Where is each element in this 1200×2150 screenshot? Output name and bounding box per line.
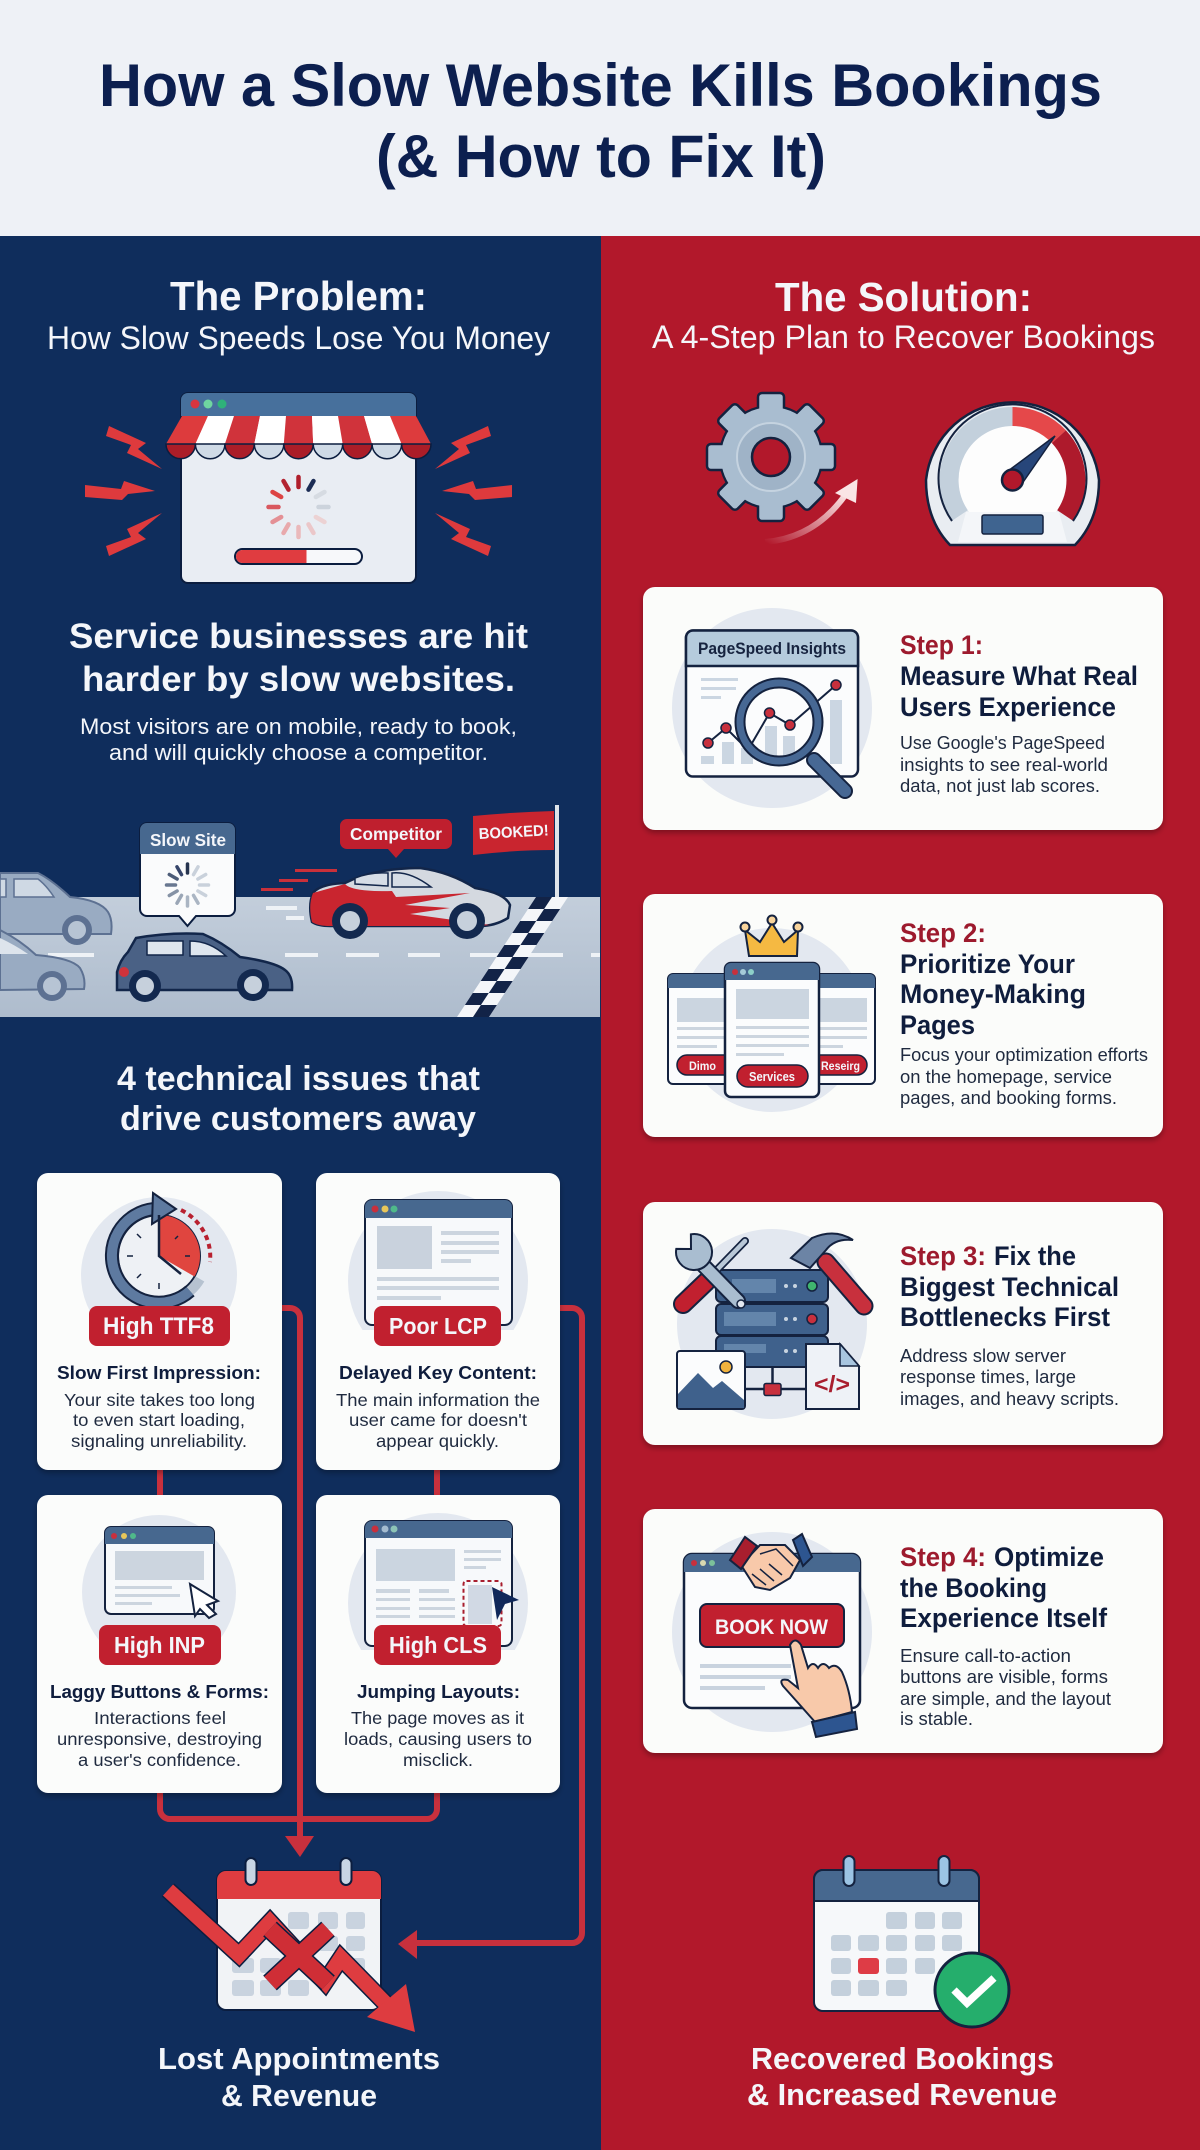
text: slow first impression: to even start loading, [73,1410,245,1430]
arrow: upward swoosh [765,479,858,542]
text: step 1: Measure What Real [900,661,1138,691]
text: slow first impression [57,1362,261,1451]
badge: Poor LCP: Poor LCP [389,1313,487,1339]
badge: High CLS [374,1625,501,1665]
icon: handshake [730,1534,812,1590]
callout: competitor: Competitor [350,824,442,844]
flag: booked [473,805,559,897]
illustration: road race scene [0,805,600,1017]
icon: connector [745,1367,806,1396]
callout: slow site: Slow Site [150,830,226,850]
badge: High CLS: High CLS [389,1632,487,1658]
icon: speedometer [926,402,1099,545]
heading: the solution: A 4-Step Plan to Recover Bookings [652,319,1155,355]
text: laggy buttons [50,1681,269,1770]
text: step 3: Bottlenecks First [900,1302,1110,1332]
text: lost appointments [158,2041,440,2113]
text: step 4 [900,1542,1111,1729]
header band [0,0,1200,236]
text: step 1 [900,630,1138,796]
arrow: down to calendar [285,1836,314,1857]
title: How a Slow Website Kills Bookings [99,52,1102,119]
text: step 2: pages, and booking forms. [900,1087,1117,1108]
badge: High INP: High INP [114,1632,205,1658]
arrow: falling revenue zigzag [168,1890,415,2032]
text: delayed key content: Delayed Key Content: [339,1362,537,1383]
text: delayed key content: The main information the [336,1390,540,1410]
text: service businesses [69,617,528,765]
badge: Poor LCP [374,1306,501,1346]
heading: the problem: How Slow Speeds Lose You Money [47,320,550,356]
heading: the solution: The Solution: [775,274,1032,320]
icon: prioritized pages: Services [749,1070,795,1084]
icon: slow storefront browser [166,393,431,583]
text: service businesses: and will quickly choose a competitor. [109,740,488,765]
icon: screwdriver [683,1241,745,1304]
heading: the problem: The Problem: [170,273,427,319]
icon: pagespeed insights: PageSpeed Insights [698,640,846,658]
text: step 4: is stable. [900,1708,973,1729]
text: step 2 [900,918,1148,1108]
text: step 3: Step 3: [900,1241,986,1271]
icon: green check [935,1953,1009,2027]
finish line [457,897,568,1017]
text: step 1: insights to see real-world [900,754,1108,775]
icon: clock [112,1193,210,1303]
text: service businesses: Service businesses are hit [69,617,528,656]
car: grey back car [0,873,112,945]
text: laggy buttons: Laggy Buttons & Forms: [50,1681,269,1702]
car: red competitor car [310,868,510,939]
flag: booked: BOOKED! [478,822,549,843]
icon: lost appointments calendar [168,1858,415,2032]
icon: pointing hand [781,1640,857,1737]
connectors: issues to lost revenue [160,1308,582,1943]
heading: the solution [652,274,1155,355]
text: step 3: Biggest Technical [900,1272,1119,1302]
text: jumping layouts [344,1681,532,1770]
text: step 4: the Booking [900,1573,1047,1603]
text: jumping layouts: The page moves as it [351,1708,524,1728]
car: grey front car [0,930,84,1001]
text: step 1: Use Google's PageSpeed [900,732,1105,753]
card: high TTFB [37,1173,282,1470]
text: jumping layouts: Jumping Layouts: [357,1681,520,1702]
text: recovered bookings: & Increased Revenue [747,2077,1057,2112]
text: step 2: on the homepage, service [900,1066,1112,1087]
text: step 1: data, not just lab scores. [900,775,1100,796]
title: (& How to Fix It) [376,123,826,190]
heading: 4 technical issues [117,1060,480,1138]
text: step 2: Prioritize Your [900,949,1075,979]
heading: the problem [47,273,550,356]
text: slow first impression: Your site takes too long [64,1390,255,1410]
text: step 4: Ensure call-to-action [900,1645,1071,1666]
text: service businesses: Most visitors are on mobile, ready to book, [80,714,517,739]
text: lost appointments: Lost Appointments [158,2041,440,2076]
text: step 4: buttons are visible, forms [900,1666,1108,1687]
panel: the solution [601,236,1200,2150]
text: step 3 [900,1241,1119,1409]
icon: book now browser: BOOK NOW [715,1615,829,1639]
text: step 4: Optimize [994,1542,1104,1572]
text: laggy buttons: a user's confidence. [78,1750,241,1770]
icon: crown [740,916,802,956]
icon: browser with cursor [105,1527,218,1618]
title [99,52,1102,190]
icon: shifting layout [365,1521,519,1646]
text: step 2: Step 2: [900,918,986,948]
icon: code file [806,1344,859,1409]
text: delayed key content: user came for doesn't [349,1410,527,1430]
icon: hammer [791,1233,864,1306]
card: step 4 [643,1509,1163,1753]
text: delayed key content [336,1362,540,1451]
card: step 3 [643,1202,1163,1445]
panel: the problem [0,236,601,2150]
text: step 1: Users Experience [900,692,1116,722]
text: step 2: Money-Making [900,979,1086,1009]
text: jumping layouts: loads, causing users to [344,1729,532,1749]
card: step 1 [643,587,1163,830]
text: laggy buttons: unresponsive, destroying [57,1729,262,1749]
text: service businesses: harder by slow websites. [82,660,515,699]
text: delayed key content: appear quickly. [376,1431,499,1451]
text: step 4: Experience Itself [900,1603,1108,1633]
arrow: left to calendar [398,1930,417,1959]
text: recovered bookings: Recovered Bookings [751,2041,1054,2076]
text: step 3: Fix the [994,1241,1076,1271]
text: slow first impression: Slow First Impression: [57,1362,261,1383]
icon: prioritized pages: Reseirg [821,1061,860,1073]
icon: prioritized pages [668,916,875,1097]
text: recovered bookings [747,2041,1057,2112]
car: slow blue car [117,934,292,1002]
icon: gear [707,393,835,521]
card: high INP [37,1495,282,1793]
text: step 4: Step 4: [900,1542,986,1572]
card: high CLS [316,1495,560,1793]
icon: wrench [676,1234,745,1308]
card: poor LCP [316,1173,560,1470]
icon: lightning bolts [85,426,512,556]
text: step 1: Step 1: [900,630,983,660]
text: step 2: Focus your optimization efforts [900,1044,1148,1065]
text: jumping layouts: misclick. [403,1750,473,1770]
text: step 4: are simple, and the layout [900,1688,1111,1709]
text: slow first impression: signaling unreliability. [71,1431,247,1451]
icon: book now browser [684,1534,860,1737]
heading: 4 technical issues: drive customers away [120,1100,476,1138]
heading: 4 technical issues: 4 technical issues that [117,1060,480,1098]
badge: High TTF8 [89,1306,230,1346]
text: lost appointments: & Revenue [221,2078,377,2113]
text: step 3: images, and heavy scripts. [900,1388,1119,1409]
text: step 3: response times, large [900,1366,1076,1387]
icon: code file: </> [814,1371,850,1397]
icon: pagespeed insights [686,630,858,791]
text: laggy buttons: Interactions feel [94,1708,226,1728]
icon: prioritized pages: Dimo [689,1061,716,1073]
text: step 2: Pages [900,1010,975,1040]
icon: image file [677,1351,745,1409]
text: step 3: Address slow server [900,1345,1066,1366]
icon: browser content [365,1200,512,1325]
callout: slow site [140,823,235,926]
badge: High INP [99,1625,221,1665]
badge: High TTF8: High TTF8 [103,1313,214,1340]
icon: recovered calendar [814,1856,1009,2027]
card: step 2 [643,894,1163,1137]
callout: competitor [340,819,452,858]
icon: server and tools [676,1233,864,1409]
